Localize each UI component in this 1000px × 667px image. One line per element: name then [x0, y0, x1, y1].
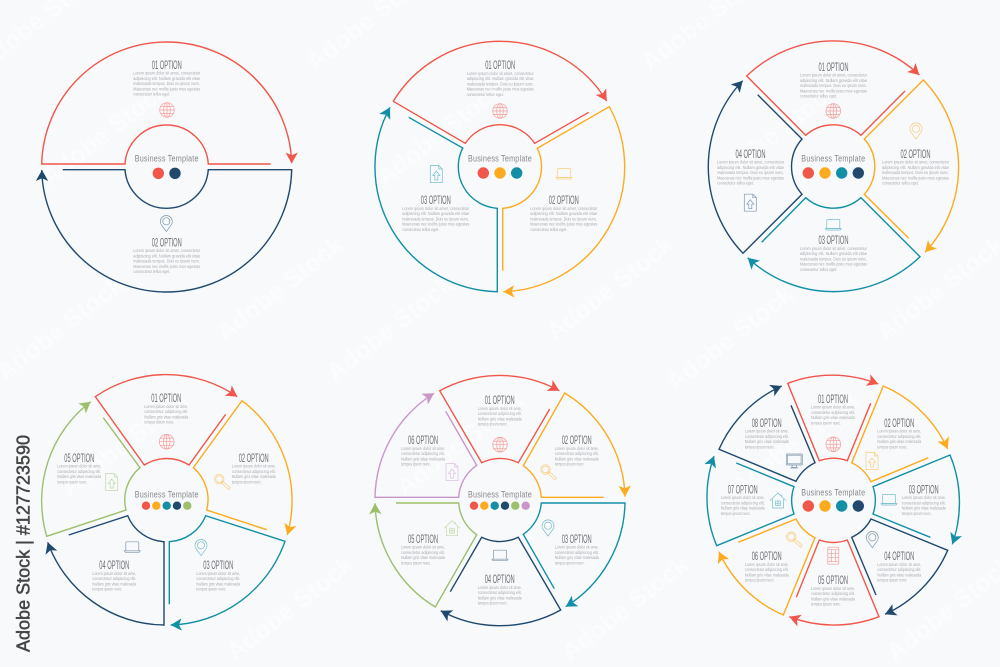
watermark pattern: Adobe Stock	[706, 76, 844, 192]
text: 01 option: Maecenas nec mollis justo mus egestas	[467, 87, 534, 92]
segment 02 orange with arrow	[864, 80, 959, 257]
text: 03 option: 03 OPTION	[421, 195, 451, 207]
text: 02 option: adipiscing elit. Nullam gravida elit vitae	[530, 211, 598, 216]
text: 04 option: consectetur adipiscing elit.	[478, 590, 522, 595]
text: 03 option: tempus ipsum nunc.	[196, 587, 226, 592]
text: 03 option	[800, 235, 868, 272]
icon: magnifier	[214, 474, 230, 490]
text: 01 option: consectetur adipiscing elit.	[144, 409, 188, 414]
watermark pattern: Adobe Stock	[556, 551, 694, 667]
text: 05 option: tempus ipsum nunc.	[811, 602, 841, 607]
text: 07 option: Nullam gris vitae malesada	[721, 506, 765, 511]
text: 04 option: 04 OPTION	[99, 560, 129, 572]
text: 01 option	[467, 60, 534, 97]
segment 01 red with arrow	[440, 375, 562, 463]
text: 08 option: 08 OPTION	[752, 418, 782, 430]
text: 01 option	[800, 62, 868, 98]
text: 06 option: tempus ipsum nunc.	[401, 462, 431, 467]
text: 04 option: 04 OPTION	[884, 551, 914, 563]
text: 01 option	[133, 60, 201, 96]
text: 03 option: Lorem ipsum dolor sit amet, consectetur	[800, 246, 867, 251]
text: 02 option: Maecenas nec mollis justo mus egestas	[133, 264, 201, 269]
text: 04 option	[92, 560, 137, 592]
text: 01 option: 01 OPTION	[818, 394, 848, 406]
text: 06 option	[745, 551, 789, 583]
text: 02 option: consectetur adipiscing elit.	[877, 434, 921, 439]
text: 05 option: 05 OPTION	[64, 453, 94, 465]
icon: pin	[160, 216, 172, 232]
text: 02 option: Nullam gris vitae malesada	[232, 474, 276, 479]
text: 08 option: Lorem ipsum dolor sit ame,	[745, 428, 789, 434]
text: 03 option: Nullam gris vitae malesada	[902, 506, 946, 511]
watermark pattern: Adobe Stock	[321, 271, 459, 387]
text: 07 option: 07 OPTION	[728, 484, 758, 496]
text: 04 option: tempus ipsum nunc.	[92, 587, 122, 592]
text: 02 option: 02 OPTION	[152, 237, 182, 249]
watermark pattern: Adobe Stock	[36, 76, 174, 192]
text: 02 option: Lorem ipsum dolor sit amet, consectetur	[882, 160, 949, 164]
panel: five-option circle	[42, 375, 296, 631]
text: 04 option: 04 OPTION	[736, 149, 766, 161]
text: 03 option: malesuada tempus. Duis eu ipsum nunc.	[402, 216, 469, 221]
segment 03 teal with arrow	[169, 516, 285, 631]
text: 01 option: Nullam gris vitae malesada	[811, 415, 855, 420]
segment 03 teal with arrow	[375, 104, 497, 292]
text: 01 option: 01 OPTION	[818, 62, 848, 74]
text: 03 option: Nullam gris vitae malesada	[196, 581, 241, 586]
text: 01 option: tempus ipsum nunc.	[478, 422, 508, 427]
text: 02 option: malesuada tempus. Duis eu ipsum nunc.	[133, 259, 200, 264]
text: 03 option: Nullam gris vitae malesada	[555, 555, 599, 560]
segment 03 teal with arrow	[873, 455, 962, 546]
center title: Business Template	[135, 154, 199, 165]
text: 05 option: consectetur adipiscing elit.	[811, 591, 855, 596]
icon: pin	[195, 540, 207, 556]
watermark pattern: Adobe Stock	[391, 386, 529, 502]
text: 02 option: Lorem ipsum dolor sit amet, consectetur	[133, 248, 201, 253]
text: 01 option: malesuada tempus. Duis eu ipsum nunc.	[800, 83, 867, 88]
text: 02 option: Lorem ipsum dolor sit ame,	[232, 464, 276, 468]
segment 01 red with arrow	[788, 374, 881, 461]
segment 08 navy with arrow	[719, 380, 815, 481]
icon: house	[444, 521, 460, 536]
text: 03 option	[402, 195, 470, 232]
center title: Business Template	[468, 489, 532, 500]
text: 05 option: Lorem ipsum dolor sit ame,	[57, 464, 101, 468]
text: 04 option: Lorem ipsum dolor sit ame,	[478, 585, 522, 590]
text: 03 option: tempus ipsum nunc.	[902, 511, 932, 516]
color dots	[478, 167, 522, 179]
text: 02 option	[877, 418, 922, 449]
text: 04 option: Nullam gris vitae malesada	[478, 595, 522, 600]
watermark pattern: Adobe Stock	[221, 551, 359, 667]
text: 03 option: consectetur adipiscing elit.	[196, 576, 240, 581]
icon: laptop	[492, 550, 508, 561]
text: 02 option: Maecenas nec mollis justo mus egestas	[530, 222, 598, 227]
icon: globe	[159, 434, 174, 449]
text: 05 option: Lorem ipsum dolor sit ame,	[811, 586, 855, 591]
text: 03 option: 03 OPTION	[203, 560, 233, 572]
text: 05 option: 05 OPTION	[818, 575, 848, 587]
text: 05 option	[401, 534, 445, 565]
text: 01 option: Lorem ipsum dolor sit amet, consectetur	[800, 72, 867, 78]
text: 01 option: malesuada tempus. Duis eu ipsum nunc.	[133, 81, 200, 86]
text: 04 option: adipiscing elit. Nullam gravida elit vitae	[717, 165, 784, 170]
segment 02 navy with arrow	[36, 170, 292, 292]
text: 04 option	[717, 149, 785, 186]
icon: pin	[542, 520, 554, 536]
text: 01 option: adipiscing elit. Nullam gravida elit vitae	[467, 76, 534, 81]
segment 05 green with arrow	[369, 503, 477, 607]
text: 02 option: malesuada tempus. Duis eu ipsum nunc.	[882, 170, 949, 175]
text: 02 option	[530, 195, 598, 232]
text: 02 option: consectetur tellus eget.	[530, 227, 567, 232]
text: 05 option: tempus ipsum nunc.	[401, 560, 431, 565]
text: 05 option: Nullam gris vitae malesada	[401, 555, 445, 560]
text: 01 option	[478, 395, 522, 427]
text: 01 option: adipiscing elit. Nullam gravida elit vitae	[800, 78, 867, 83]
text: 04 option: Lorem ipsum dolor sit ame,	[92, 571, 136, 576]
text: 05 option: consectetur adipiscing elit.	[57, 469, 101, 474]
text: 06 option: Lorem ipsum dolor sit ame,	[401, 446, 445, 451]
icon: laptop	[556, 168, 572, 179]
color dots	[470, 502, 530, 510]
color dots	[153, 168, 181, 179]
icon: file	[866, 452, 878, 470]
text: 03 option: tempus ipsum nunc.	[555, 560, 585, 565]
text: 03 option: Maecenas nec mollis justo mus egestas	[800, 262, 868, 267]
text: 06 option: Nullam gris vitae malesada	[745, 572, 789, 577]
segment 02 orange with arrow	[523, 393, 631, 497]
text: 01 option: adipiscing elit. Nullam gravida elit vitae	[133, 76, 201, 81]
icon: laptop	[124, 542, 140, 552]
watermark pattern: Adobe Stock	[211, 231, 349, 347]
text: 01 option: consectetur tellus eget.	[467, 92, 504, 97]
icon: file	[106, 474, 118, 490]
segment 05 red with arrow	[787, 540, 879, 626]
segment 04 navy with arrow	[438, 537, 561, 626]
segment 01 red with arrow	[747, 41, 924, 135]
text: 01 option: tempus ipsum nunc.	[144, 420, 174, 425]
text: 06 option	[401, 435, 445, 467]
segment 03 teal with arrow	[743, 198, 920, 292]
text: 02 option: consectetur tellus eget.	[133, 269, 170, 274]
text: 03 option: 03 OPTION	[909, 484, 939, 496]
text: 02 option: tempus ipsum nunc.	[877, 444, 907, 449]
text: 01 option: consectetur tellus eget.	[133, 92, 170, 96]
text: 04 option	[877, 551, 922, 583]
text: 01 option	[811, 394, 855, 425]
text: 01 option: Maecenas nec mollis justo mus egestas	[800, 88, 868, 93]
text: 03 option: Lorem ipsum dolor sit ame,	[555, 544, 599, 550]
text: 03 option	[902, 484, 946, 516]
segment 04 navy with arrow	[708, 76, 802, 253]
segment 01 red with arrow	[393, 41, 612, 143]
color dots	[803, 167, 864, 179]
text: 01 option: Lorem ipsum dolor sit amet, consectetur	[133, 70, 201, 76]
text: 02 option	[232, 453, 276, 484]
watermark pattern: Adobe Stock	[661, 281, 799, 397]
text: 01 option: Nullam gris vitae malesada	[478, 416, 522, 421]
text: 05 option: 05 OPTION	[408, 534, 438, 546]
text: 03 option: Maecenas nec mollis justo mus egestas	[402, 222, 470, 227]
text: 01 option: 01 OPTION	[485, 395, 515, 407]
text: 04 option	[478, 574, 522, 606]
text: 02 option: consectetur tellus eget.	[882, 180, 919, 186]
text: 03 option: 03 OPTION	[562, 534, 592, 546]
segment 04 navy with arrow	[852, 519, 948, 620]
stock id label: Adobe Stock | #127723590	[12, 435, 34, 652]
text: 07 option: consectetur adipiscing elit.	[721, 500, 765, 505]
text: 02 option: adipiscing elit. Nullam gravida elit vitae	[133, 253, 201, 258]
text: 03 option: consectetur tellus eget.	[800, 267, 837, 272]
segment 05 green with arrow	[42, 397, 140, 536]
text: 01 option: Lorem ipsum dolor sit ame,	[811, 404, 855, 410]
text: 02 option: 02 OPTION	[562, 435, 592, 447]
watermark pattern: Adobe Stock	[541, 231, 679, 347]
text: 02 option: malesuada tempus. Duis eu ipsum nunc.	[530, 216, 597, 221]
panel: six-option circle	[369, 375, 631, 626]
text: 06 option: tempus ipsum nunc.	[745, 578, 775, 583]
icon: file	[744, 194, 756, 211]
icon: monitor	[786, 454, 802, 468]
text: 03 option: adipiscing elit. Nullam gravida elit vitae	[402, 211, 470, 216]
text: 06 option: 06 OPTION	[752, 551, 782, 563]
panel: two-option circle	[36, 42, 298, 292]
panel: three-option circle	[375, 41, 625, 298]
text: 02 option: 02 OPTION	[900, 149, 930, 161]
text: 02 option: Lorem ipsum dolor sit ame,	[555, 446, 599, 451]
text: 04 option: Nullam gris vitae malesada	[877, 572, 922, 577]
icon: globe	[160, 103, 174, 117]
text: 05 option	[811, 575, 855, 607]
text: 04 option: 04 OPTION	[485, 574, 515, 586]
icon: globe	[493, 437, 507, 452]
center title: Business Template	[468, 154, 532, 165]
color dots	[803, 500, 864, 512]
text: 02 option: Maecenas nec mollis justo mus egestas	[882, 175, 950, 180]
icon: file	[446, 464, 458, 480]
text: 08 option: tempus ipsum nunc.	[745, 444, 775, 449]
segment 06 purple with arrow	[375, 388, 477, 497]
segment 04 navy with arrow	[42, 516, 164, 625]
text: 02 option: consectetur adipiscing elit.	[555, 451, 599, 456]
text: 03 option: consectetur adipiscing elit.	[902, 500, 946, 505]
text: 04 option: consectetur adipiscing elit.	[92, 576, 136, 581]
text: 04 option: Lorem ipsum dolor sit amet, consectetur	[717, 160, 784, 164]
text: 06 option: Nullam gris vitae malesada	[401, 456, 445, 461]
text: 03 option: consectetur adipiscing elit.	[555, 550, 599, 555]
segment 02 orange with arrow	[852, 386, 953, 482]
icon: laptop	[825, 220, 841, 230]
text: 04 option: tempus ipsum nunc.	[877, 578, 907, 583]
text: 02 option: 02 OPTION	[549, 195, 579, 207]
text: 04 option: consectetur adipiscing elit.	[877, 567, 921, 572]
text: 05 option: Nullam gris vitae malesada	[811, 596, 855, 601]
color dots	[142, 502, 192, 510]
icon: pin	[866, 532, 878, 548]
text: 02 option: 02 OPTION	[884, 418, 914, 430]
text: 01 option: malesuada tempus. Duis eu ipsum nunc.	[467, 81, 534, 86]
text: 05 option	[57, 453, 102, 484]
text: 03 option: Lorem ipsum dolor sit ame,	[196, 571, 240, 576]
text: 02 option: Nullam gris vitae malesada	[555, 456, 599, 461]
text: 03 option: Lorem ipsum dolor sit ame,	[902, 495, 946, 500]
text: 03 option	[555, 534, 599, 565]
text: 06 option: consectetur adipiscing elit.	[401, 451, 445, 456]
segment 07 teal with arrow	[704, 454, 794, 546]
text: 01 option: 01 OPTION	[152, 60, 182, 72]
text: 01 option: Lorem ipsum dolor sit ame,	[144, 404, 188, 409]
text: 01 option: consectetur tellus eget.	[800, 94, 837, 98]
center title: Business Template	[135, 489, 199, 500]
text: 05 option: Nullam gris vitae malesada	[57, 474, 102, 479]
text: 02 option: adipiscing elit. Nullam gravida elit vitae	[882, 165, 949, 170]
text: 05 option: Lorem ipsum dolor sit ame,	[401, 544, 445, 550]
text: 02 option	[133, 237, 201, 274]
watermark pattern: Adobe Stock	[371, 76, 509, 192]
text: 01 option: Nullam gris vitae malesada	[144, 414, 189, 419]
text: 02 option	[555, 435, 599, 467]
text: 04 option: Maecenas nec mollis justo mus egestas	[717, 175, 785, 180]
text: 01 option: consectetur adipiscing elit.	[478, 411, 522, 416]
text: 07 option: tempus ipsum nunc.	[721, 511, 751, 516]
text: 01 option: 01 OPTION	[485, 60, 515, 72]
icon: house	[770, 493, 786, 508]
text: 06 option: 06 OPTION	[408, 435, 438, 447]
text: 05 option: consectetur adipiscing elit.	[401, 550, 445, 555]
segment 01 red with arrow	[95, 375, 241, 465]
text: 02 option: Lorem ipsum dolor sit ame,	[877, 428, 921, 434]
text: 01 option	[144, 393, 189, 425]
icon: pin	[910, 123, 922, 139]
segment 02 orange with arrow	[193, 401, 296, 537]
text: 02 option	[882, 149, 950, 186]
watermark pattern: Adobe Stock	[726, 386, 864, 502]
icon: tablet	[828, 547, 839, 564]
panel: four-option circle	[708, 41, 959, 292]
text: 08 option: Nullam gris vitae malesada	[745, 439, 789, 444]
text: 05 option: tempus ipsum nunc.	[57, 479, 87, 484]
text: 02 option: tempus ipsum nunc.	[555, 462, 585, 467]
icon: globe	[493, 104, 507, 118]
text: 03 option: Lorem ipsum dolor sit amet, consectetur	[402, 206, 470, 211]
segment 01 red with arrow	[42, 42, 298, 164]
text: 06 option: Lorem ipsum dolor sit ame,	[745, 562, 789, 567]
icon: file	[430, 166, 442, 182]
text: 02 option: Nullam gris vitae malesada	[877, 439, 922, 444]
icon: magnifier	[786, 532, 802, 547]
text: 03 option: 03 OPTION	[818, 235, 848, 247]
text: 03 option: malesuada tempus. Duis eu ipsum nunc.	[800, 256, 867, 261]
icon: magnifier	[541, 465, 556, 480]
text: 06 option: consectetur adipiscing elit.	[745, 567, 789, 572]
text: 01 option: Lorem ipsum dolor sit amet, consectetur	[467, 71, 534, 76]
icon: laptop	[881, 494, 897, 505]
text: 02 option: 02 OPTION	[239, 453, 269, 465]
segment 03 teal with arrow	[523, 503, 625, 612]
text: 04 option: tempus ipsum nunc.	[478, 601, 508, 606]
text: 02 option: consectetur adipiscing elit.	[232, 469, 276, 474]
segment 06 orange with arrow	[713, 519, 815, 615]
icon: globe	[826, 437, 841, 452]
center title: Business Template	[801, 154, 865, 165]
text: 03 option: consectetur tellus eget.	[402, 227, 439, 232]
text: 01 option: 01 OPTION	[151, 393, 181, 405]
text: 03 option: adipiscing elit. Nullam gravida elit vitae	[800, 251, 867, 256]
text: 04 option: Nullam gris vitae malesada	[92, 581, 137, 586]
icon: globe	[826, 104, 841, 118]
text: 01 option: Maecenas nec mollis justo mus egestas	[133, 86, 201, 91]
text: 08 option	[745, 418, 789, 449]
text: 01 option: tempus ipsum nunc.	[811, 420, 841, 425]
text: 07 option: Lorem ipsum dolor sit ame,	[721, 495, 765, 500]
text: 03 option	[196, 560, 241, 592]
segment 02 orange with arrow	[503, 107, 625, 298]
center title: Business Template	[801, 487, 865, 498]
text: 08 option: consectetur adipiscing elit.	[745, 434, 789, 439]
text: 04 option: consectetur tellus eget.	[717, 180, 754, 186]
text: 01 option: Lorem ipsum dolor sit ame,	[478, 406, 522, 411]
text: 07 option	[721, 484, 765, 516]
panel: eight-option circle	[704, 374, 962, 626]
text: 04 option: Lorem ipsum dolor sit ame,	[877, 562, 921, 567]
watermark pattern: Adobe Stock	[56, 386, 194, 502]
text: 02 option: tempus ipsum nunc.	[232, 479, 262, 484]
text: 02 option: Lorem ipsum dolor sit amet, consectetur	[530, 206, 598, 211]
text: 01 option: consectetur adipiscing elit.	[811, 410, 855, 415]
text: 04 option: malesuada tempus. Duis eu ipsum nunc.	[717, 170, 784, 175]
